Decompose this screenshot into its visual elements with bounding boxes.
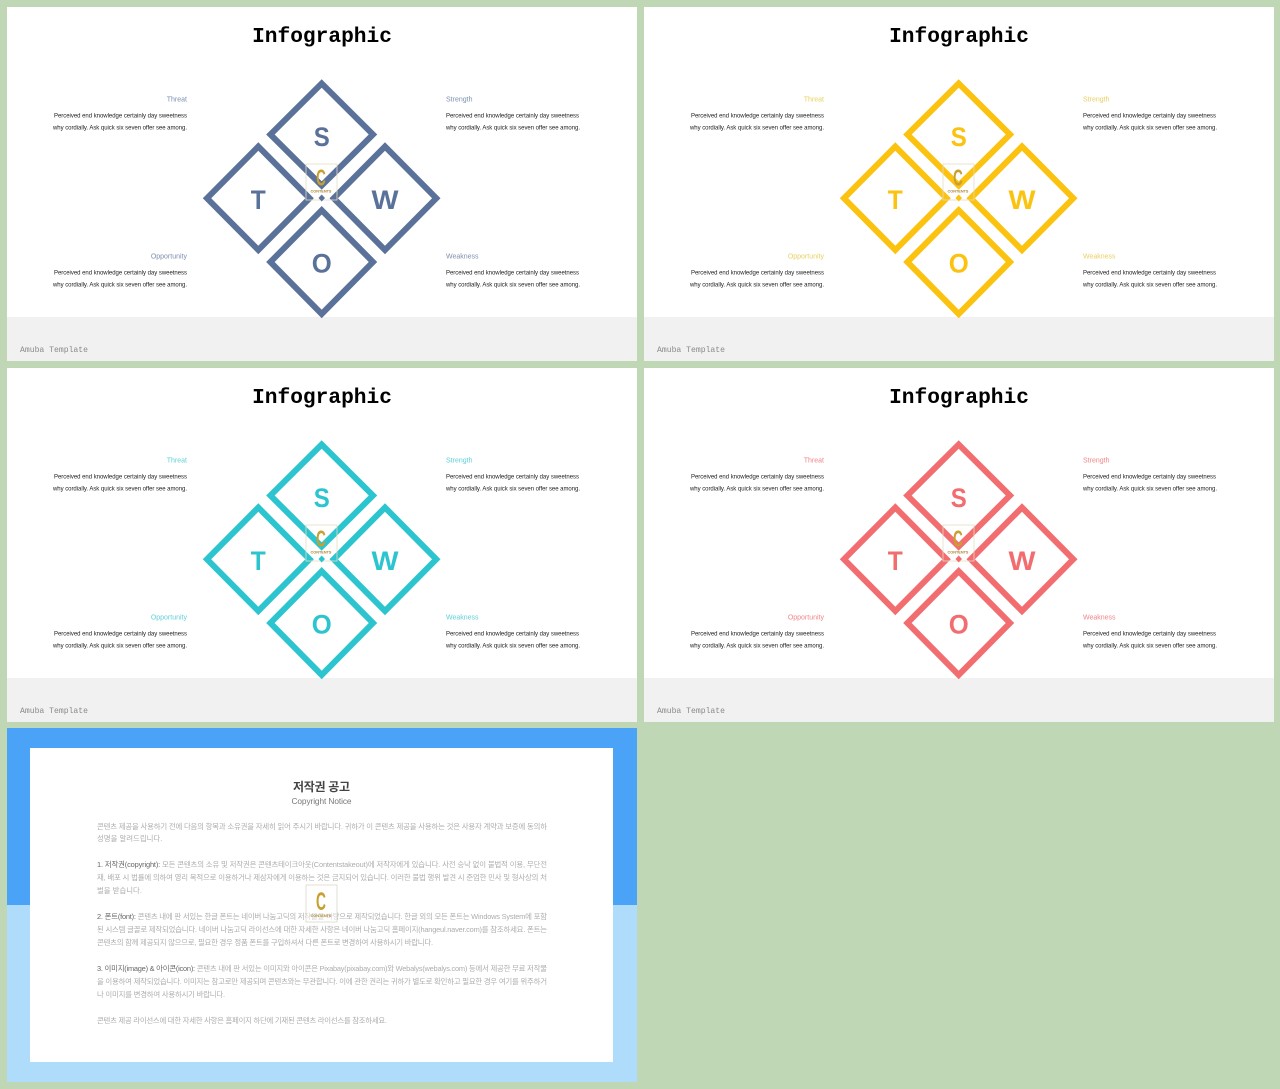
SWOT letters: W	[1008, 185, 1036, 215]
text block: weakness	[1082, 614, 1217, 650]
panel: teal SWOT slide	[7, 368, 637, 722]
text block: strength: Strength	[1083, 96, 1110, 104]
SWOT letters: W	[1008, 546, 1036, 576]
text block: threat: Perceived end knowledge certainly day sweetness	[54, 114, 187, 120]
SWOT letters: S	[951, 122, 967, 152]
text block: license note: 콘텐츠 제공 라이선스에 대한 자세한 사항은 홈페이지 하단에 기재된 콘텐츠 라이선스를 참조하세요.	[97, 1016, 387, 1025]
logo watermark: C	[953, 527, 963, 553]
SWOT letters: T	[251, 185, 266, 215]
text block: introduction	[97, 822, 547, 843]
text block: strength: Strength	[446, 458, 473, 464]
logo watermark: CONTENTS	[948, 190, 969, 194]
text block: weakness: Weakness	[1083, 614, 1116, 622]
SWOT diamonds	[844, 84, 1073, 314]
text block: opportunity: Perceived end knowledge certainly day sweetness	[691, 270, 824, 276]
footer label: Amuba Template	[20, 346, 88, 355]
text block: opportunity: Perceived end knowledge certainly day sweetness	[54, 270, 187, 276]
text block: weakness: why cordially. Ask quick six seven offer see among.	[1082, 644, 1217, 650]
text block: font: 콘텐츠의 함께 제공되지 않으므로, 필요한 경우 정품 폰트를 구입하셔서 다른 폰트로 변경하여 사용하시기 바랍니다.	[97, 938, 433, 947]
logo watermark: CONTENTS	[311, 914, 332, 918]
panel: copyright notice slide	[7, 728, 637, 1082]
text block: threat: why cordially. Ask quick six seven offer see among.	[689, 486, 824, 492]
text block: threat: Threat	[167, 458, 187, 464]
text block: introduction: 성명을 알려드립니다.	[97, 834, 162, 843]
text block: copyright	[97, 860, 547, 895]
text block: opportunity: Opportunity	[788, 614, 824, 622]
text block: threat: Perceived end knowledge certainly day sweetness	[691, 474, 824, 480]
text block: strength: Perceived end knowledge certainly day sweetness	[446, 114, 579, 120]
text block: strength: Perceived end knowledge certainly day sweetness	[1083, 474, 1216, 480]
text block: weakness: why cordially. Ask quick six seven offer see among.	[1082, 282, 1217, 288]
text block: weakness: why cordially. Ask quick six seven offer see among.	[445, 282, 580, 288]
logo watermark: CONTENTS	[311, 190, 332, 194]
text block: font: 된 시스템 글꼴로 제작되었습니다. 네이버 나눔고딕 라이선스에 대한 자세한 사항은 네이버 나눔고딕 홈페이지(hangeul.naver.com)를 참조하세요. 폰트는	[97, 925, 547, 934]
text block: opportunity: Opportunity	[151, 614, 187, 622]
heading: Infographic	[889, 386, 1029, 410]
text block: opportunity	[689, 614, 824, 650]
text block: weakness: Weakness	[446, 614, 479, 622]
text block: threat: Perceived end knowledge certainly day sweetness	[54, 474, 187, 480]
panel: yellow SWOT slide	[644, 7, 1274, 361]
SWOT diamonds	[844, 444, 1073, 675]
logo watermark	[306, 525, 337, 562]
text block: weakness: Perceived end knowledge certainly day sweetness	[446, 632, 579, 638]
SWOT letters	[888, 483, 1036, 640]
text block: threat	[689, 96, 824, 132]
text block: strength: Strength	[446, 96, 473, 104]
text block: opportunity: why cordially. Ask quick six seven offer see among.	[689, 644, 824, 650]
text block: threat: why cordially. Ask quick six seven offer see among.	[52, 126, 187, 132]
text block: image and icon: 나 이미지를 변경하여 사용하시기 바랍니다.	[97, 990, 225, 999]
text block: copyright: 1. 저작권(copyright): 모든 콘텐츠의 소유 및 저작권은 콘텐츠테이크아웃(Contentstakeout)에 저작자에게 있습니다. 사전 승낙 없이 불법적 이용, 무단전	[97, 860, 547, 869]
logo watermark: C	[316, 166, 326, 192]
text block: threat: why cordially. Ask quick six seven offer see among.	[52, 486, 187, 492]
text block: opportunity	[52, 614, 187, 650]
text block: copyright: 재, 배포 시 법률에 의하여 영리 목적으로 이용하거나 제삼자에게 이용하는 것은 금지되어 있습니다. 이러한 불법 행위 발견 시 준엄한 민사 및 형사상의 처	[97, 873, 547, 882]
logo watermark	[306, 164, 337, 202]
text block: opportunity: why cordially. Ask quick six seven offer see among.	[52, 282, 187, 288]
logo watermark	[943, 164, 974, 202]
SWOT letters: T	[888, 185, 903, 215]
text block: weakness: Perceived end knowledge certainly day sweetness	[446, 270, 579, 276]
text block: threat: Threat	[804, 96, 824, 104]
text block: opportunity: why cordially. Ask quick six seven offer see among.	[689, 282, 824, 288]
logo watermark	[306, 885, 337, 922]
logo watermark: C	[953, 166, 963, 192]
heading: Infographic	[252, 25, 392, 49]
heading: copyright notice: Copyright Notice	[292, 796, 352, 806]
text block: image and icon: 을 이용하여 제작되었습니다. 이미지는 참고로만 제공되며 콘텐츠와는 무관합니다. 이에 관한 권리는 귀하가 별도로 확인하고 필요한 경우 여기를 위주하거	[97, 977, 547, 986]
text block: strength: why cordially. Ask quick six seven offer see among.	[445, 486, 580, 492]
text block: copyright: 벌을 받습니다.	[97, 886, 142, 895]
SWOT letters: O	[949, 610, 969, 640]
logo watermark: C	[316, 527, 326, 553]
text block: weakness	[445, 614, 580, 650]
text block: weakness: why cordially. Ask quick six seven offer see among.	[445, 644, 580, 650]
text block: weakness: Perceived end knowledge certainly day sweetness	[1083, 632, 1216, 638]
SWOT letters: T	[251, 546, 266, 576]
text block: opportunity: Perceived end knowledge certainly day sweetness	[691, 632, 824, 638]
SWOT letters: S	[951, 483, 967, 513]
SWOT letters: S	[314, 122, 330, 152]
SWOT letters	[251, 122, 399, 278]
text block: opportunity	[52, 254, 187, 288]
panel: coral SWOT slide	[644, 368, 1274, 722]
text block: threat	[52, 458, 187, 492]
SWOT letters: O	[312, 610, 332, 640]
SWOT letters: O	[312, 248, 332, 278]
text block: strength	[1082, 458, 1217, 492]
text block: threat: Perceived end knowledge certainly day sweetness	[691, 114, 824, 120]
logo watermark: CONTENTS	[948, 550, 969, 554]
text block: font: 2. 폰트(font): 콘텐츠 내에 판 서있는 한글 폰트는 네이버 나눔고딕의 저작물을 바탕으로 제작되었습니다. 한글 외의 모든 폰트는 Windows System에 포함	[97, 912, 547, 921]
text block: strength: why cordially. Ask quick six seven offer see among.	[445, 126, 580, 132]
SWOT letters	[251, 483, 399, 640]
text block: strength: why cordially. Ask quick six seven offer see among.	[1082, 486, 1217, 492]
text block: weakness: Perceived end knowledge certainly day sweetness	[1083, 270, 1216, 276]
heading: copyright notice: 저작권 공고	[293, 779, 350, 794]
text block: introduction: 콘텐츠 제공을 사용하기 전에 다음의 항목과 소유권을 자세히 읽어 주시기 바랍니다. 귀하가 이 콘텐츠 제공을 사용하는 것은 사용자 계약과 보증에 동의하	[97, 822, 547, 831]
text block: strength: Strength	[1083, 458, 1110, 464]
SWOT letters: T	[888, 546, 903, 576]
text block: threat	[52, 96, 187, 132]
text block: weakness	[445, 254, 580, 288]
text block: weakness: Weakness	[446, 254, 479, 260]
footer label: Amuba Template	[657, 346, 725, 355]
SWOT letters	[888, 122, 1036, 278]
heading: Infographic	[252, 386, 392, 410]
SWOT diamonds	[207, 444, 436, 675]
text block: weakness: Weakness	[1083, 254, 1116, 260]
logo watermark	[943, 525, 974, 562]
text block: strength: Perceived end knowledge certainly day sweetness	[1083, 114, 1216, 120]
text block: strength: why cordially. Ask quick six seven offer see among.	[1082, 126, 1217, 132]
text block: threat: Threat	[804, 458, 824, 464]
text block: threat: Threat	[167, 96, 187, 104]
footer label: Amuba Template	[20, 707, 88, 716]
text block: strength	[445, 96, 580, 132]
SWOT letters: W	[372, 185, 399, 215]
SWOT letters: S	[314, 483, 330, 513]
SWOT diamonds	[207, 84, 436, 314]
text block: opportunity: why cordially. Ask quick six seven offer see among.	[52, 644, 187, 650]
logo watermark: C	[316, 889, 326, 916]
text block: strength: Perceived end knowledge certainly day sweetness	[446, 474, 579, 480]
text block: strength	[1082, 96, 1217, 132]
heading: Infographic	[889, 25, 1029, 49]
text block: threat: why cordially. Ask quick six seven offer see among.	[689, 126, 824, 132]
text block: image and icon: 3. 이미지(image) & 아이콘(icon): 콘텐츠 내에 판 서있는 이미지와 아이콘은 Pixabay(pixabay.com)와 Webalys(webalys.com) 등에서 제공한 무료 저작물	[97, 964, 547, 973]
text block: threat	[689, 458, 824, 492]
footer label: Amuba Template	[657, 707, 725, 716]
text block: font	[97, 912, 547, 947]
text block: opportunity: Perceived end knowledge certainly day sweetness	[54, 632, 187, 638]
text block: image and icon	[97, 964, 547, 999]
SWOT letters: O	[949, 248, 969, 278]
text block: weakness	[1082, 254, 1217, 288]
logo watermark: CONTENTS	[311, 550, 332, 554]
heading: copyright notice	[292, 779, 352, 806]
text block: opportunity	[689, 254, 824, 288]
SWOT letters: W	[372, 546, 399, 576]
text block: strength	[445, 458, 580, 492]
panel: slate SWOT slide	[7, 7, 637, 361]
text block: opportunity: Opportunity	[788, 254, 824, 260]
text block: opportunity: Opportunity	[151, 254, 187, 260]
